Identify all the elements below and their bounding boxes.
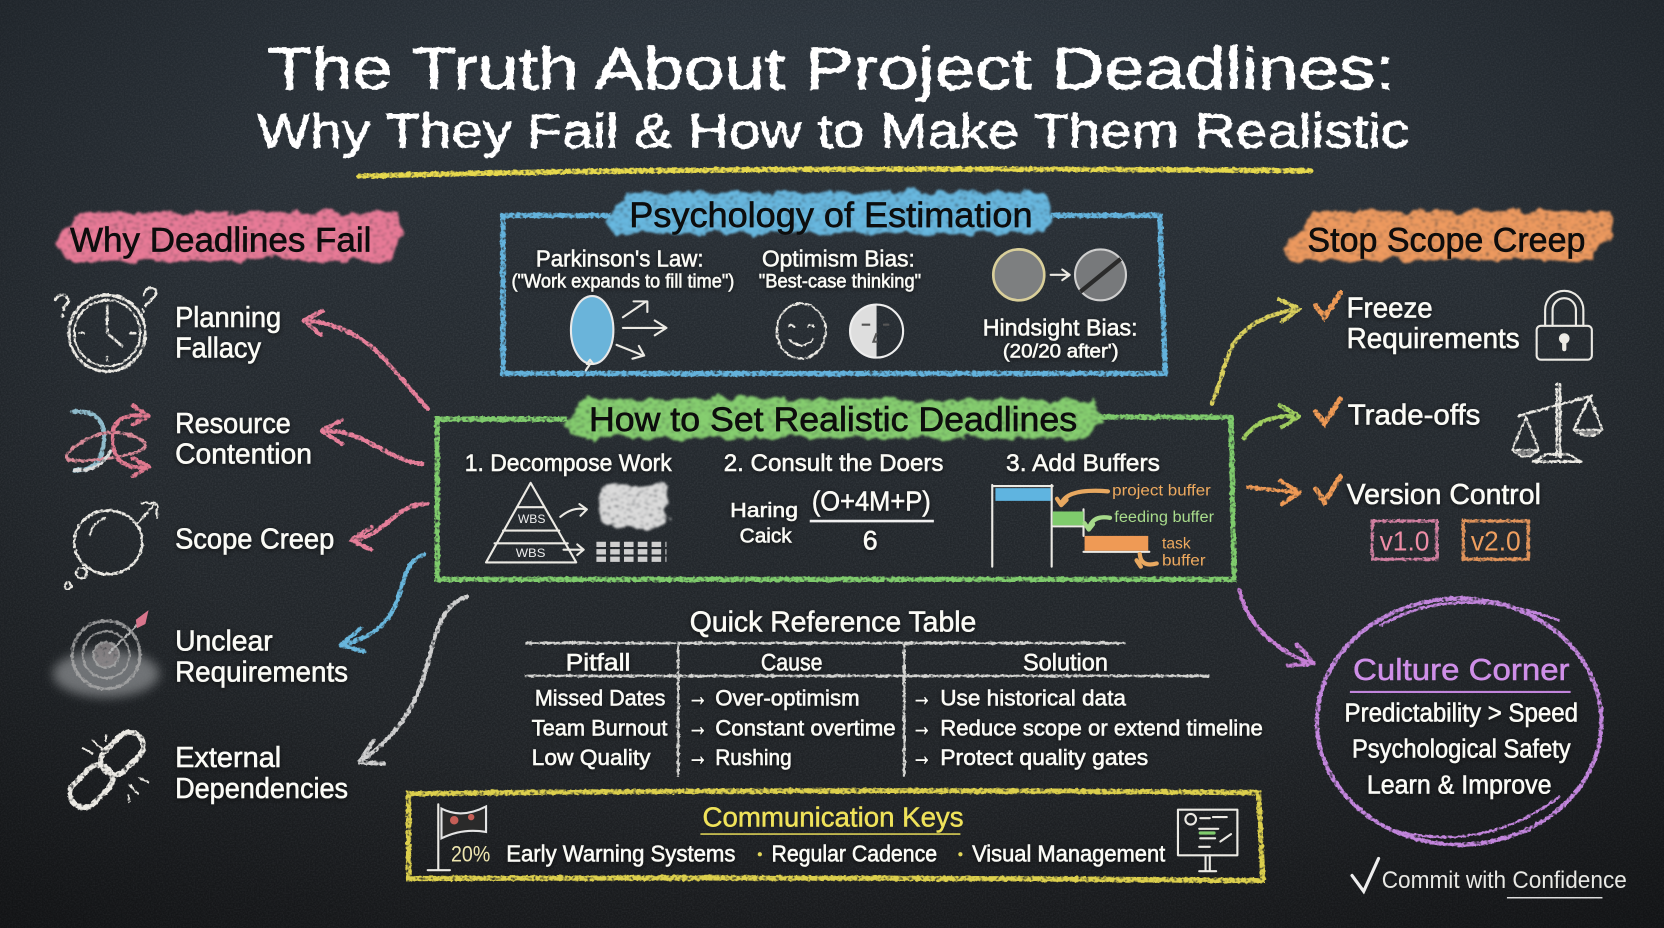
- panel border: [503, 215, 1165, 374]
- text: step headings: 1. Decompose Work: [465, 450, 672, 477]
- icon: cloud of work breaking to tasks: [596, 486, 669, 559]
- text: unclear requirements: Unclear: [175, 626, 273, 658]
- table row: low quality: Rushing: [715, 745, 792, 770]
- heading banner: stop scope creep: [1281, 211, 1615, 260]
- heading: communication keys: Communication Keys: [703, 802, 964, 833]
- arrow: to trade-offs: [1244, 405, 1299, 438]
- badge: v2.0: [1463, 521, 1528, 559]
- icon: half-shaded face: [850, 305, 903, 358]
- icon: clock: [55, 288, 156, 371]
- hand-drawn circle: [1317, 599, 1601, 845]
- text: optimism bias: [759, 245, 921, 293]
- title: [257, 35, 1409, 159]
- text: freeze requirements: Requirements: [1347, 323, 1520, 355]
- table row: team burnout: →: [688, 710, 708, 742]
- text: buffer labels: [1112, 483, 1215, 570]
- table header: Pitfall: [566, 650, 630, 677]
- table row: team burnout: →: [912, 710, 932, 742]
- title: Why They Fail & How to Make Them Realistic: [257, 106, 1409, 159]
- text: unclear requirements: Requirements: [175, 656, 348, 688]
- table row: low quality: →: [688, 740, 708, 772]
- text: trade-offs: Trade-offs: [1348, 399, 1480, 431]
- text: communication items: [506, 841, 1166, 867]
- icon: inflating bubble with arrow: [65, 503, 157, 589]
- table row: missed dates: Use historical data: [940, 686, 1127, 711]
- table row: low quality: Low Quality: [532, 745, 651, 770]
- icon: wbs pyramid: WBS: [518, 513, 546, 526]
- text: step headings: [465, 450, 1160, 477]
- text: freeze requirements: Freeze: [1347, 292, 1433, 324]
- heading banner: stop scope creep: Stop Scope Creep: [1307, 221, 1585, 259]
- panel: quick reference table: [525, 606, 1263, 777]
- icon: wbs pyramid: WBS: [516, 547, 546, 560]
- title: The Truth About Project Deadlines:: [267, 35, 1396, 102]
- text: external dependencies: Dependencies: [175, 773, 348, 805]
- text: buffer labels: task: [1162, 536, 1191, 553]
- arrow: to external dependencies: [360, 596, 467, 764]
- table row: team burnout: [532, 710, 1263, 742]
- text: hindsight bias: Hindsight Bias:: [983, 314, 1138, 340]
- text: buffer labels: buffer: [1162, 553, 1206, 570]
- title underline: [359, 169, 1311, 176]
- heading banner: why deadlines fail: Why Deadlines Fail: [70, 221, 371, 259]
- table row: missed dates: Missed Dates: [535, 686, 665, 711]
- badge: v2.0: v2.0: [1471, 526, 1521, 557]
- text: optimism bias: "Best-case thinking": [759, 272, 921, 293]
- icon: broken chain: [64, 726, 149, 813]
- text: external dependencies: External: [175, 742, 281, 774]
- text: version control: Version Control: [1347, 479, 1541, 511]
- panel border: [437, 417, 1234, 579]
- text: communication items: Early Warning Systems: [506, 841, 735, 867]
- text: planning fallacy: Planning: [175, 302, 281, 334]
- text: planning fallacy: [175, 302, 281, 365]
- text: culture values: Psychological Safety: [1352, 736, 1571, 764]
- chart: buffer gantt: [992, 483, 1215, 570]
- table row: missed dates: [535, 681, 1127, 713]
- table row: team burnout: Reduce scope or extend timeline: [940, 715, 1263, 740]
- icon: warning flag: [428, 804, 486, 870]
- icon: smiling face: [777, 303, 826, 359]
- table header: [566, 650, 1108, 677]
- icon: scales: [1512, 384, 1602, 462]
- text: communication items: Visual Management: [972, 841, 1166, 867]
- text: 20 percent: 20%: [451, 842, 490, 867]
- icon: visual board: [1178, 810, 1237, 871]
- panel border: [409, 791, 1263, 881]
- arrow: to freeze requirements: [1212, 299, 1299, 403]
- text: hindsight bias: [983, 314, 1138, 363]
- table row: low quality: [532, 740, 1148, 772]
- panel: culture corner: [1317, 599, 1601, 845]
- panel: stop scope creep: [1281, 211, 1615, 559]
- table row: low quality: →: [912, 740, 932, 772]
- arrow: to unclear requirements: [341, 554, 424, 652]
- heading banner: why deadlines fail: [55, 212, 403, 261]
- text: scope creep: Scope Creep: [175, 524, 334, 556]
- badge: v1.0: [1372, 521, 1437, 559]
- table row: low quality: Protect quality gates: [940, 745, 1148, 770]
- checkmarks: [1316, 293, 1340, 502]
- text: culture values: Learn & Improve: [1367, 772, 1552, 800]
- text: parkinson's law: [512, 245, 734, 293]
- heading: quick reference table: Quick Reference Table: [690, 606, 976, 638]
- icon: tangled arrows: [67, 405, 149, 476]
- arrow: to planning fallacy: [304, 311, 428, 409]
- heading banner: psychology of estimation: Psychology of Estimation: [629, 196, 1033, 235]
- text: step headings: 3. Add Buffers: [1006, 450, 1160, 477]
- arrow: to resource contention: [322, 420, 422, 464]
- icon: wbs pyramid: [486, 483, 587, 562]
- text: freeze requirements: [1347, 292, 1520, 355]
- text: external dependencies: [175, 742, 348, 805]
- callout: commit with confidence: Commit with Confidence: [1382, 867, 1627, 894]
- text: step headings: 2. Consult the Doers: [724, 450, 943, 477]
- icon: padlock: [1537, 291, 1592, 360]
- text: resource contention: Contention: [175, 439, 312, 471]
- text: buffer labels: project buffer: [1112, 483, 1212, 500]
- text: planning fallacy: Fallacy: [175, 333, 262, 365]
- heading banner: how to set realistic deadlines: How to Set Realistic Deadlines: [589, 401, 1077, 439]
- table row: missed dates: →: [912, 681, 932, 713]
- text: estimation formula: Haring: [730, 500, 798, 522]
- icon: hindsight lenses: [993, 249, 1126, 300]
- table row: missed dates: →: [688, 681, 708, 713]
- table row: team burnout: Constant overtime: [715, 715, 896, 740]
- panel: how to set realistic deadlines: [437, 399, 1234, 579]
- arrow: to version control: [1248, 481, 1300, 504]
- badge: v1.0: v1.0: [1380, 526, 1429, 557]
- text: estimation formula: Caick: [740, 525, 793, 547]
- table header: Solution: [1023, 650, 1108, 677]
- text: communication items: Regular Cadence: [772, 841, 937, 867]
- panel: psychology of estimation: [503, 192, 1165, 374]
- table header: Cause: [761, 650, 822, 677]
- panel: communication keys: [409, 791, 1263, 881]
- callout: commit with confidence: [1352, 858, 1627, 898]
- arrows: buffer callouts: [1057, 491, 1157, 567]
- text: parkinson's law: ("Work expands to fill time"): [512, 272, 734, 293]
- heading: culture corner: Culture Corner: [1353, 652, 1570, 687]
- text: buffer labels: feeding buffer: [1114, 509, 1215, 526]
- text: culture values: Predictability > Speed: [1345, 700, 1578, 728]
- text: resource contention: [175, 408, 312, 471]
- text: resource contention: Resource: [175, 408, 291, 440]
- icon: target in cloud: [53, 610, 159, 697]
- text: estimation formula: 6: [863, 526, 878, 556]
- table row: missed dates: Over-optimism: [715, 686, 860, 711]
- text: parkinson's law: Parkinson's Law:: [536, 245, 704, 271]
- text: optimism bias: Optimism Bias:: [762, 245, 915, 271]
- arrow: to scope creep: [351, 504, 427, 550]
- text: estimation formula: (O+4M+P): [812, 485, 931, 516]
- icon: balloon with arrows: [571, 296, 666, 370]
- arrow: to culture corner: [1240, 590, 1314, 665]
- text: hindsight bias: (20/20 after'): [1003, 342, 1119, 363]
- text: estimation formula: [730, 485, 934, 556]
- panel: why deadlines fail: [53, 212, 403, 813]
- text: culture values: [1345, 700, 1578, 800]
- text: unclear requirements: [175, 626, 348, 688]
- table row: team burnout: Team Burnout: [532, 715, 668, 740]
